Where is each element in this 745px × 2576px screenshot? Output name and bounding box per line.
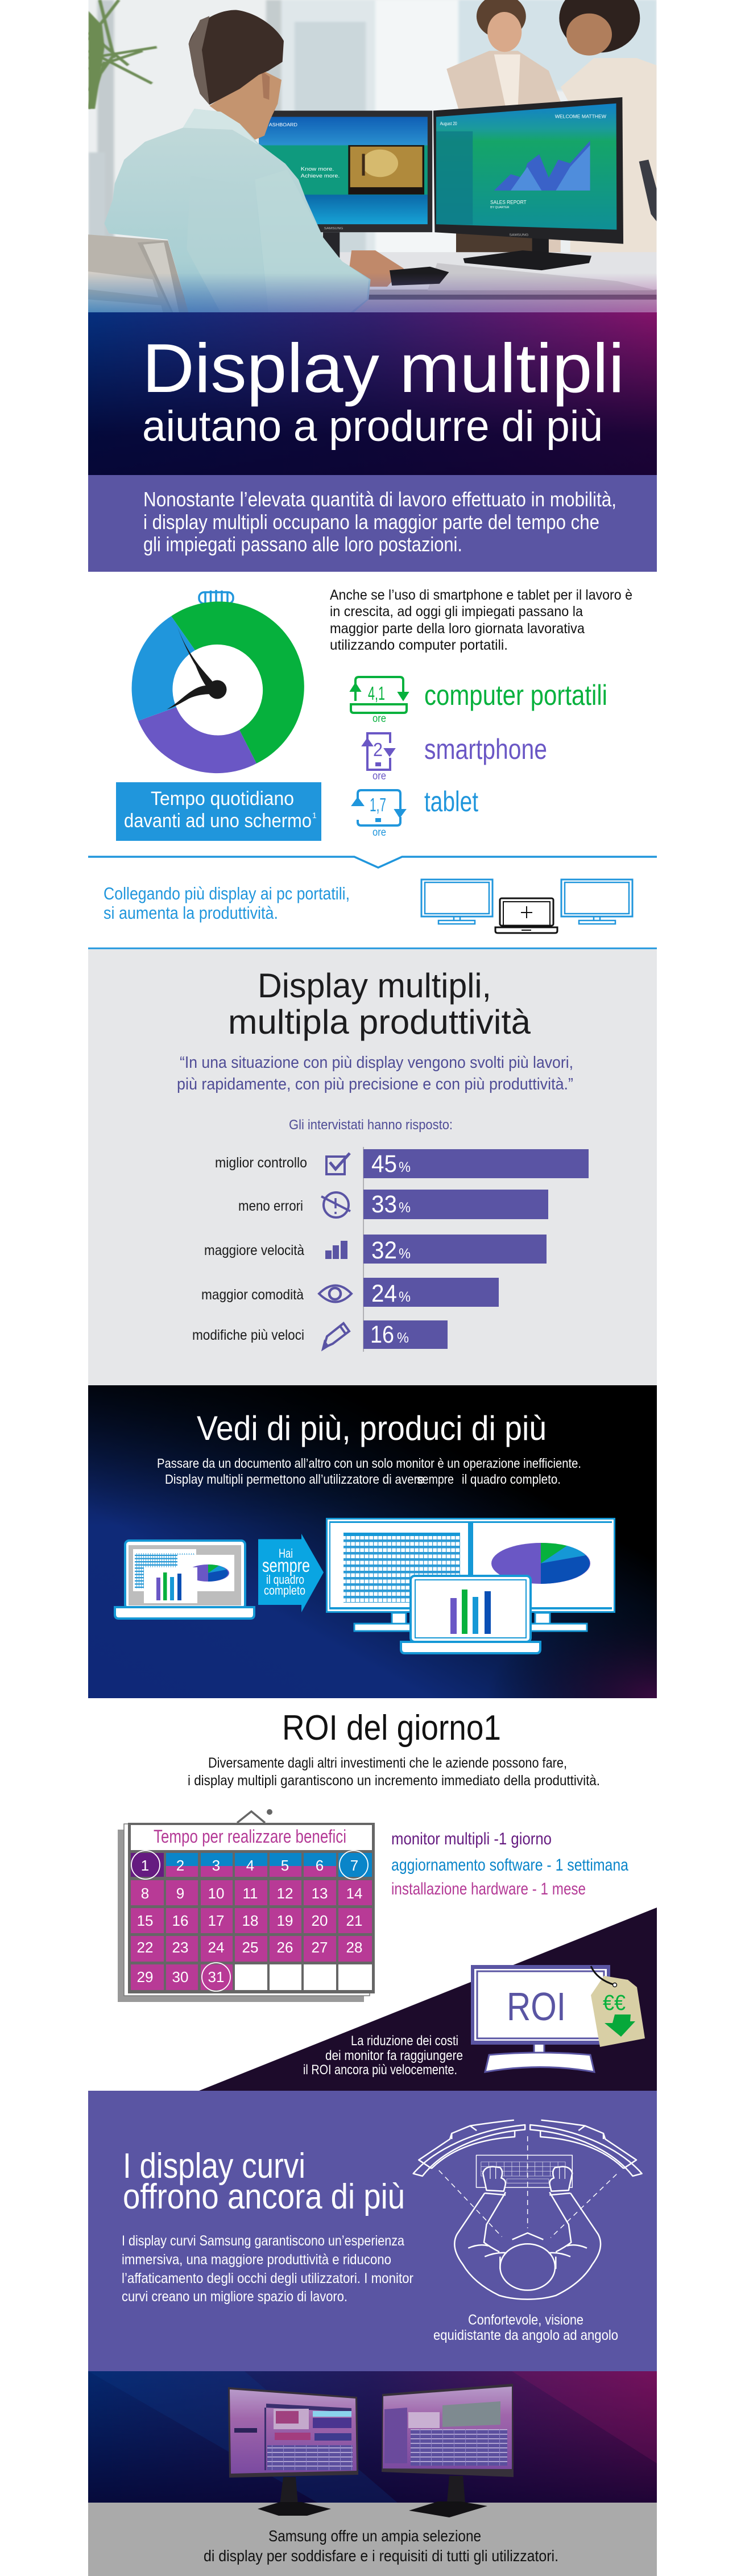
- calendar: 3: [212, 1857, 220, 1874]
- calendar: 28: [346, 1939, 362, 1956]
- clock crown: [199, 590, 233, 604]
- caption: equidistante da angolo ad angolo: [433, 2327, 618, 2343]
- device usage paragraph: Anche se l’uso di smartphone e tablet per il lavoro è: [330, 587, 632, 603]
- device row: tablet 1,7 ore: [353, 786, 478, 839]
- panel: samsung product range: [88, 2371, 657, 2576]
- clock hands: [167, 624, 226, 709]
- cost reduction note: il ROI ancora più velocemente.: [303, 2062, 457, 2078]
- calendar: 25: [242, 1939, 258, 1956]
- calendar: 21: [346, 1912, 362, 1929]
- chevron divider: [88, 857, 657, 868]
- hero bottom colour fade: [88, 273, 657, 313]
- calendar: 29: [137, 1968, 153, 1985]
- heading: multipla produttività: [228, 1003, 531, 1041]
- chart caption box: Tempo quotidiano: [151, 788, 294, 810]
- device usage paragraph: utilizzando computer portatili.: [330, 637, 508, 653]
- bar chart: 16: [370, 1321, 394, 1348]
- cost reduction note: dei monitor fa raggiungere: [325, 2048, 463, 2063]
- icon: eye: [319, 1286, 351, 1302]
- device row: laptop 4,1 ore: ore: [372, 713, 386, 725]
- calendar legend: installazione hardware - 1 mese: [391, 1880, 586, 1898]
- calendar: 9: [176, 1885, 184, 1902]
- calendar: 27: [312, 1939, 328, 1956]
- calendar legend: monitor multipli -1 giorno: [391, 1830, 552, 1848]
- price tag: [591, 1966, 645, 2047]
- right monitor: August 20: [440, 121, 457, 127]
- calendar: 11: [242, 1885, 258, 1902]
- calendar: 23: [172, 1939, 188, 1956]
- right monitor: SAMSUNG: [510, 234, 529, 237]
- heading: Vedi di più, produci di più: [197, 1409, 547, 1447]
- top-view diagram: person at curved monitors: [413, 2120, 642, 2300]
- calendar: 24: [208, 1939, 224, 1956]
- device row: tablet 1,7 ore: 1,7: [370, 794, 386, 815]
- device row: smartphone 2 ore: ore: [372, 770, 386, 782]
- intro panel: i display multipli occupano la maggior parte del tempo che: [143, 510, 599, 534]
- bar labels: modifiche più veloci: [192, 1327, 304, 1343]
- left monitor: Achieve more.: [301, 173, 340, 179]
- right monitor: SALES REPORT: [490, 200, 527, 205]
- bar labels: maggior comodità: [201, 1287, 304, 1303]
- chart caption box: davanti ad uno schermo: [124, 810, 312, 832]
- calendar: 6: [316, 1857, 324, 1874]
- calendar: 10: [208, 1885, 224, 1902]
- calendar: 5: [281, 1857, 289, 1874]
- arrow: always the full picture: Hai: [279, 1546, 293, 1561]
- cost reduction note: La riduzione dei costi: [351, 2033, 458, 2049]
- bar labels: [192, 1155, 307, 1343]
- right monitor: BY QUARTER: [490, 206, 510, 209]
- heading: offrono ancora di più: [123, 2177, 405, 2216]
- device usage paragraph: maggior parte della loro giornata lavorativa: [330, 621, 585, 637]
- icon: pencil: [323, 1323, 349, 1349]
- calendar: 1: [141, 1857, 149, 1874]
- man from behind: [104, 10, 371, 313]
- device row: smartphone 2 ore: [363, 733, 547, 782]
- callout: more displays more productivity: Collegando più display ai pc portatili,: [104, 884, 350, 903]
- dark triangle background: [199, 1908, 657, 2091]
- survey intro: Gli intervistati hanno risposto:: [289, 1117, 453, 1133]
- cost reduction note: [303, 2033, 463, 2078]
- ROI description: [188, 1755, 600, 1789]
- calendar legend: aggiornamento software - 1 settimana: [391, 1856, 628, 1875]
- icon: checkbox: [326, 1153, 350, 1174]
- donut clock chart: [132, 590, 304, 773]
- arrow: always the full picture: sempre: [262, 1555, 310, 1576]
- left monitor: Know more.: [301, 166, 334, 172]
- icon: smartphone: [363, 733, 394, 770]
- icon: no errors: [321, 1192, 350, 1217]
- woman left: [446, 0, 561, 254]
- calendar legend: [391, 1830, 628, 1898]
- callout: more displays more productivity: si aumenta la produttività.: [104, 903, 278, 923]
- arrow: always the full picture: il quadro: [266, 1572, 304, 1587]
- closing text: [204, 2527, 558, 2565]
- right monitor: WELCOME MATTHEW: [555, 114, 607, 119]
- ROI monitor with price tag: [471, 1965, 645, 2072]
- left monitor: SAMSUNG: [324, 228, 343, 230]
- device row: smartphone 2 ore: smartphone: [424, 733, 547, 765]
- dual monitor setup: [326, 1518, 615, 1631]
- callout: more displays more productivity: [104, 884, 350, 923]
- divider: [88, 948, 657, 949]
- intro panel: Nonostante l’elevata quantità di lavoro effettuato in mobilità,: [143, 488, 616, 511]
- chart caption box: [116, 782, 321, 841]
- device usage paragraph: [330, 587, 632, 653]
- icon: speed bars: [325, 1241, 347, 1259]
- intro panel: [88, 475, 657, 572]
- calendar: 20: [312, 1912, 328, 1929]
- calendar: 2: [176, 1857, 184, 1874]
- bar chart: 33: [371, 1191, 397, 1218]
- heading: I display curvi: [123, 2146, 305, 2186]
- calendar: 15: [137, 1912, 153, 1929]
- title: display multipli: Display multipli: [142, 329, 624, 407]
- description: Display multipli permettono all’utilizzatore di avere: [165, 1472, 424, 1487]
- bar chart: %: [397, 1330, 409, 1346]
- panel: curved displays: [88, 2091, 657, 2371]
- arrow: always the full picture: [258, 1534, 324, 1612]
- calendar: 16: [172, 1912, 188, 1929]
- description: il quadro completo.: [462, 1472, 561, 1487]
- description: [122, 2233, 413, 2305]
- caption: Confortevole, visione: [468, 2312, 583, 2328]
- intro panel: gli impiegati passano alle loro postazioni.: [143, 532, 462, 556]
- right monitor: [433, 97, 623, 270]
- calendar: 22: [137, 1939, 153, 1956]
- calendar: 30: [172, 1968, 188, 1985]
- bar labels: maggiore velocità: [204, 1242, 304, 1258]
- calendar: 17: [208, 1912, 224, 1929]
- left monitor: [259, 111, 432, 258]
- arrow: always the full picture: completo: [264, 1583, 305, 1597]
- calendar: 8: [141, 1885, 149, 1902]
- calendar: 4: [246, 1857, 254, 1874]
- calendar: 31: [208, 1968, 224, 1985]
- calendar: 26: [277, 1939, 293, 1956]
- monitor left: [228, 2387, 358, 2516]
- device row: laptop 4,1 ore: computer portatili: [424, 679, 607, 711]
- calendar: [118, 1809, 374, 2002]
- caption: [433, 2312, 618, 2343]
- panel: survey results: [88, 950, 657, 1386]
- monitor right: [382, 2384, 514, 2517]
- heading: ROI: ROI del giorno1: [282, 1708, 501, 1748]
- left monitor: ASHBOARD: [269, 122, 297, 128]
- bar chart: 24: [371, 1280, 397, 1307]
- device row: laptop 4,1 ore: [351, 677, 607, 725]
- description: immersiva, una maggiore produttività e riducono: [122, 2252, 391, 2268]
- device row: laptop 4,1 ore: 4,1: [368, 683, 385, 704]
- hanger: [237, 1811, 265, 1823]
- description: Passare da un documento all’altro con un solo monitor è un operazione inefficiente.: [157, 1456, 581, 1471]
- title band: [88, 312, 657, 476]
- heading: Display multipli,: [258, 967, 491, 1005]
- device usage paragraph: in crescita, ad oggi gli impiegati passano la: [330, 604, 583, 620]
- description: [157, 1456, 581, 1487]
- calendar: 19: [277, 1912, 293, 1929]
- desk: [171, 252, 656, 289]
- bar chart: %: [399, 1246, 411, 1262]
- office chair: [88, 234, 189, 313]
- panel: see more produce more: [88, 1385, 657, 1698]
- chart caption box: 1: [312, 811, 317, 820]
- description: curvi creano un migliore spazio di lavoro.: [122, 2289, 347, 2305]
- description: I display curvi Samsung garantiscono un’esperienza: [122, 2233, 404, 2249]
- woman right: [559, 0, 657, 254]
- hero photo: office worker with dual monitors: [88, 0, 657, 313]
- calendar: 12: [277, 1885, 293, 1902]
- description: sempre: [417, 1472, 454, 1487]
- calendar: 13: [312, 1885, 328, 1902]
- office background: [88, 0, 657, 312]
- closing text: di display per soddisfare e i requisiti di tutti gli utilizzatori.: [204, 2547, 558, 2565]
- heading: [228, 967, 531, 1041]
- bar chart: %: [399, 1159, 411, 1175]
- heading: [123, 2146, 405, 2216]
- laptop with stacked windows: [115, 1541, 254, 1619]
- quote: [177, 1054, 573, 1093]
- calendar: 14: [346, 1885, 362, 1902]
- bar chart: %: [399, 1289, 411, 1305]
- bar chart: [363, 1147, 589, 1352]
- front laptop with bar chart: [401, 1576, 540, 1653]
- calendar: 7: [350, 1857, 358, 1874]
- quote: “In una situazione con più display vengono svolti più lavori,: [180, 1054, 573, 1072]
- hand and keyboard: [349, 250, 449, 287]
- subtitle: aiutano a produrre di più: [142, 402, 603, 451]
- icon: laptop: [351, 677, 407, 713]
- description: l’affaticamento degli occhi degli utilizzatori. I monitor: [122, 2270, 413, 2286]
- closing text: Samsung offre un ampia selezione: [268, 2527, 481, 2545]
- device row: tablet 1,7 ore: tablet: [424, 786, 478, 818]
- bar chart: 45: [371, 1150, 397, 1178]
- price tag: €€: [603, 1991, 626, 2015]
- bar labels: miglior controllo: [215, 1155, 307, 1171]
- ROI description: Diversamente dagli altri investimenti che le aziende possono fare,: [208, 1755, 567, 1771]
- bar labels: meno errori: [238, 1198, 303, 1214]
- bar chart: 32: [371, 1237, 397, 1264]
- quote: più rapidamente, con più precisione e con più produttività.”: [177, 1075, 573, 1093]
- icon: two monitors and laptop: [421, 880, 632, 933]
- calendar: Tempo per realizzare benefici: [154, 1826, 346, 1847]
- ROI description: i display multipli garantiscono un incremento immediato della produttività.: [188, 1773, 600, 1789]
- bar chart: %: [399, 1200, 411, 1216]
- ROI monitor with price tag: ROI: [507, 1984, 566, 2029]
- icon: tablet: [353, 790, 404, 825]
- calendar: 18: [242, 1912, 258, 1929]
- device row: tablet 1,7 ore: ore: [372, 827, 386, 839]
- device row: smartphone 2 ore: 2: [373, 739, 383, 760]
